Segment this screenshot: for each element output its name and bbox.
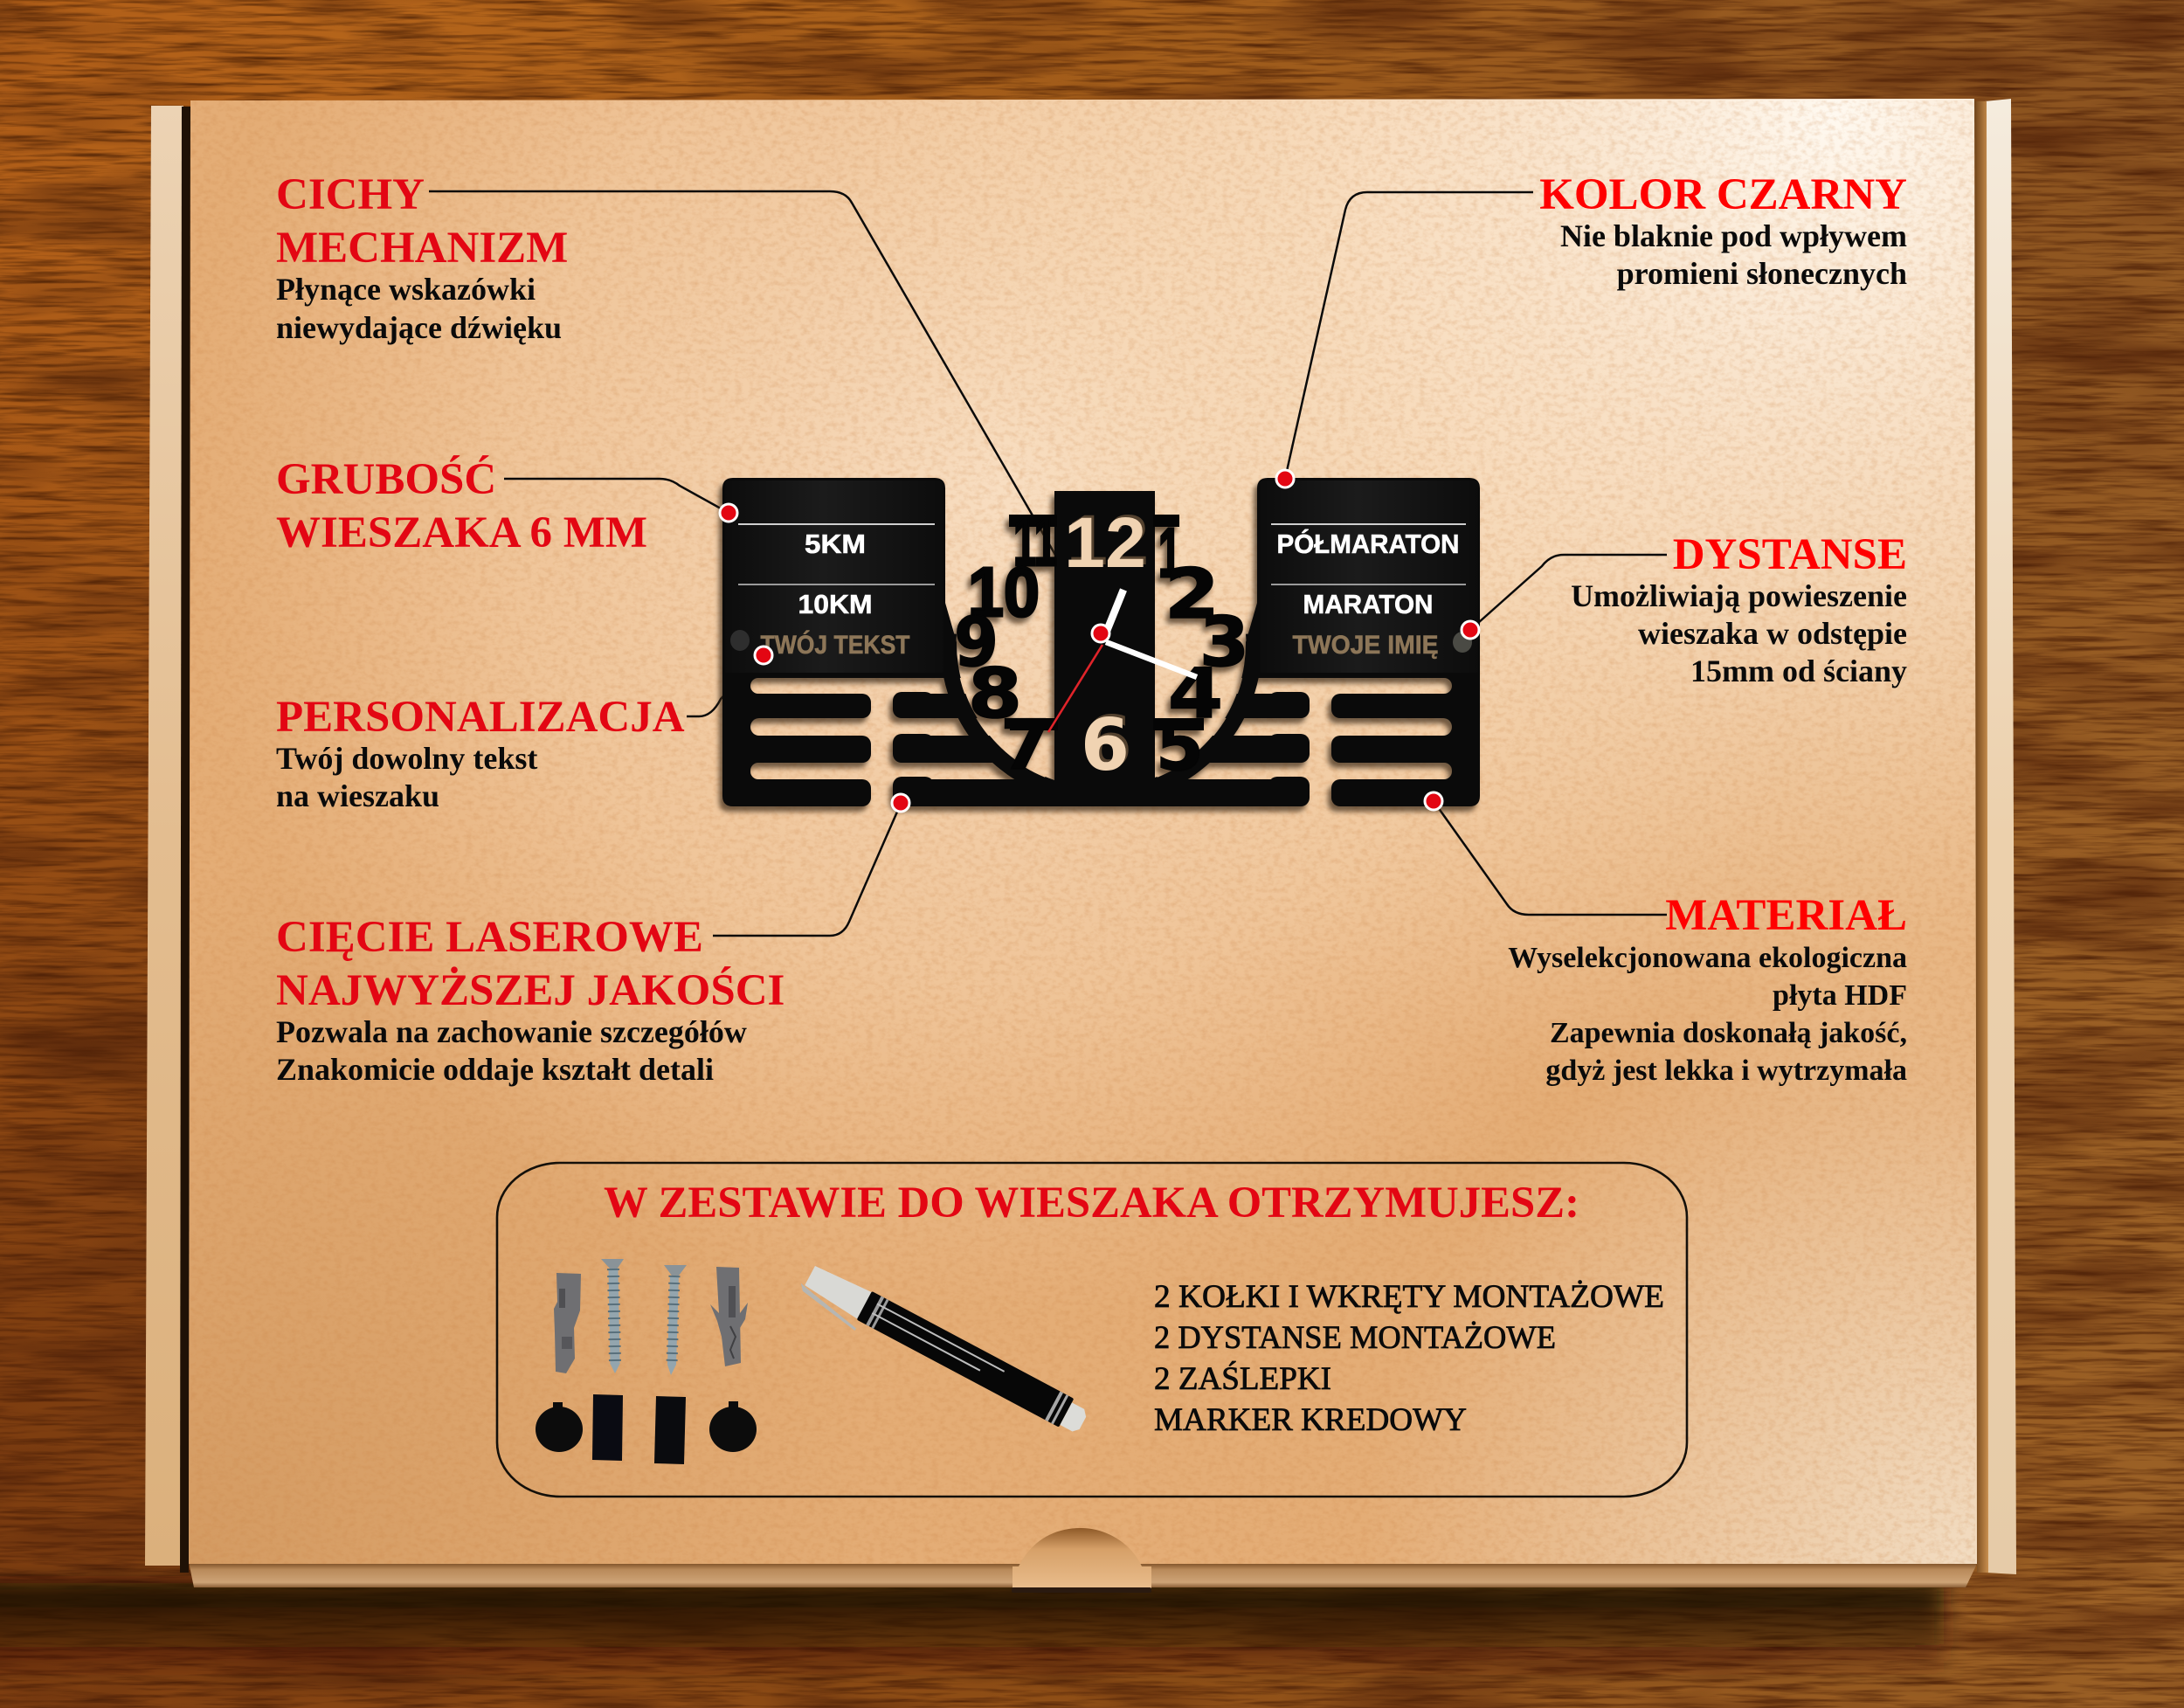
cardboard box <box>145 99 2016 1593</box>
callout: kolor czarny: promieni słonecznych <box>1617 256 1907 291</box>
left plate engraving: 10KM <box>798 589 872 619</box>
cut-out numerals 12 and 6 <box>1064 501 1149 787</box>
callout: cichy mechanizm: MECHANIZM <box>276 224 568 273</box>
clock hands <box>1048 590 1197 732</box>
icon: spacer 1 <box>592 1394 623 1461</box>
black clock numerals <box>954 502 1249 786</box>
icon: screw 1 <box>601 1259 624 1373</box>
black clock numerals: 7 <box>1000 707 1051 785</box>
black clock numerals: 8 <box>968 655 1022 734</box>
callout: dystanse: wieszaka w odstępie <box>1638 616 1907 651</box>
callout: kolor czarny: Nie blaknie pod wpływem <box>1560 218 1907 253</box>
cut-out numerals 12 and 6: 6 <box>1081 704 1130 787</box>
callout: dystanse <box>1571 530 1907 688</box>
left plate engraving: 5KM <box>805 529 866 559</box>
black clock numerals: 10 <box>968 553 1040 631</box>
callout: materiał: Wyselekcjonowana ekologiczna <box>1508 942 1907 974</box>
callout: personalizacja: na wieszaku <box>276 778 439 813</box>
black clock numerals: 11 <box>1013 502 1057 580</box>
product: clock medal hanger <box>715 468 1480 816</box>
callout: grubość wieszaka <box>276 455 647 557</box>
icon: cap 1 <box>536 1402 583 1452</box>
right plate engraving: MARATON <box>1303 589 1433 619</box>
callout: materiał: gdyż jest lekka i wytrzymała <box>1545 1055 1907 1087</box>
icon: chalk marker <box>793 1260 1091 1446</box>
callout: dystanse: Umożliwiają powieszenie <box>1571 578 1907 613</box>
callout: materiał: Zapewnia doskonałą jakość, <box>1550 1017 1907 1049</box>
callout: cichy mechanizm: CICHY <box>276 170 425 219</box>
callout dots <box>720 470 1479 812</box>
callout: cięcie laserowe: CIĘCIE LASEROWE <box>276 913 703 962</box>
callout: cięcie laserowe: Znakomicie oddaje kształt detali <box>276 1052 714 1087</box>
panel sheen <box>725 481 1478 673</box>
callout: materiał: MATERIAŁ <box>1665 891 1907 940</box>
callout: personalizacja: Twój dowolny tekst <box>276 741 537 776</box>
hanger silhouette <box>715 478 1480 816</box>
callout: dystanse: DYSTANSE <box>1673 530 1907 579</box>
black clock numerals: 9 <box>954 604 999 682</box>
icon: wall plug 1 <box>554 1273 581 1373</box>
panel: kit contents <box>497 1163 1687 1497</box>
callout leader lines <box>429 191 1667 936</box>
callout: cięcie laserowe: NAJWYŻSZEJ JAKOŚCI <box>276 966 784 1015</box>
icon: wall plug 2 <box>710 1267 748 1366</box>
callout: dystanse: 15mm od ściany <box>1690 653 1907 688</box>
black clock numerals: 3 <box>1199 604 1249 682</box>
cut-out numerals 12 and 6: 12 <box>1064 503 1146 583</box>
cut-out numerals 12 and 6: 6 <box>1083 702 1132 785</box>
callout: kolor czarny: KOLOR CZARNY <box>1539 170 1907 219</box>
kit list: 2 ZAŚLEPKI <box>1154 1360 1331 1397</box>
kit list <box>1154 1279 1664 1438</box>
right plate engraving <box>1271 523 1466 660</box>
black clock numerals: 5 <box>1156 708 1204 786</box>
callout: grubość wieszaka: WIESZAKA 6 MM <box>276 508 647 557</box>
callout: cichy mechanizm: Płynące wskazówki <box>276 272 536 307</box>
callout: kolor czarny <box>1539 170 1907 291</box>
kit list: 2 KOŁKI I WKRĘTY MONTAŻOWE <box>1154 1279 1664 1315</box>
icon: screw 2 <box>664 1265 687 1375</box>
black clock numerals: 4 <box>1168 655 1223 734</box>
callout: cichy mechanizm <box>276 170 568 345</box>
mounting screws <box>730 630 1472 653</box>
kit list: MARKER KREDOWY <box>1154 1402 1467 1438</box>
left plate engraving: TWÓJ TEKST <box>760 630 910 660</box>
right plate engraving: PÓŁMARATON <box>1277 528 1459 559</box>
callout: personalizacja <box>276 693 685 813</box>
callout: cięcie laserowe <box>276 913 784 1087</box>
cut-out numerals 12 and 6: 12 <box>1067 501 1149 580</box>
callout: cichy mechanizm: niewydające dźwięku <box>276 310 562 345</box>
callout: cięcie laserowe: Pozwala na zachowanie szczegółów <box>276 1014 747 1049</box>
callout: materiał: płyta HDF <box>1773 979 1907 1012</box>
icon: cap 2 <box>709 1401 757 1452</box>
box tab notch <box>1012 1528 1151 1593</box>
right plate engraving: TWOJE IMIĘ <box>1293 631 1438 660</box>
black clock numerals: 1 <box>1158 514 1181 591</box>
left plate engraving <box>738 523 935 660</box>
kit heading: W ZESTAWIE DO WIESZAKA OTRZYMUJESZ: <box>604 1179 1579 1227</box>
black clock numerals: 2 <box>1165 556 1220 634</box>
callout: personalizacja: PERSONALIZACJA <box>276 693 685 742</box>
callout: grubość wieszaka: GRUBOŚĆ <box>276 455 496 504</box>
icon: spacer 2 <box>654 1396 686 1464</box>
kit list: 2 DYSTANSE MONTAŻOWE <box>1154 1320 1556 1356</box>
callout: materiał <box>1508 891 1907 1087</box>
